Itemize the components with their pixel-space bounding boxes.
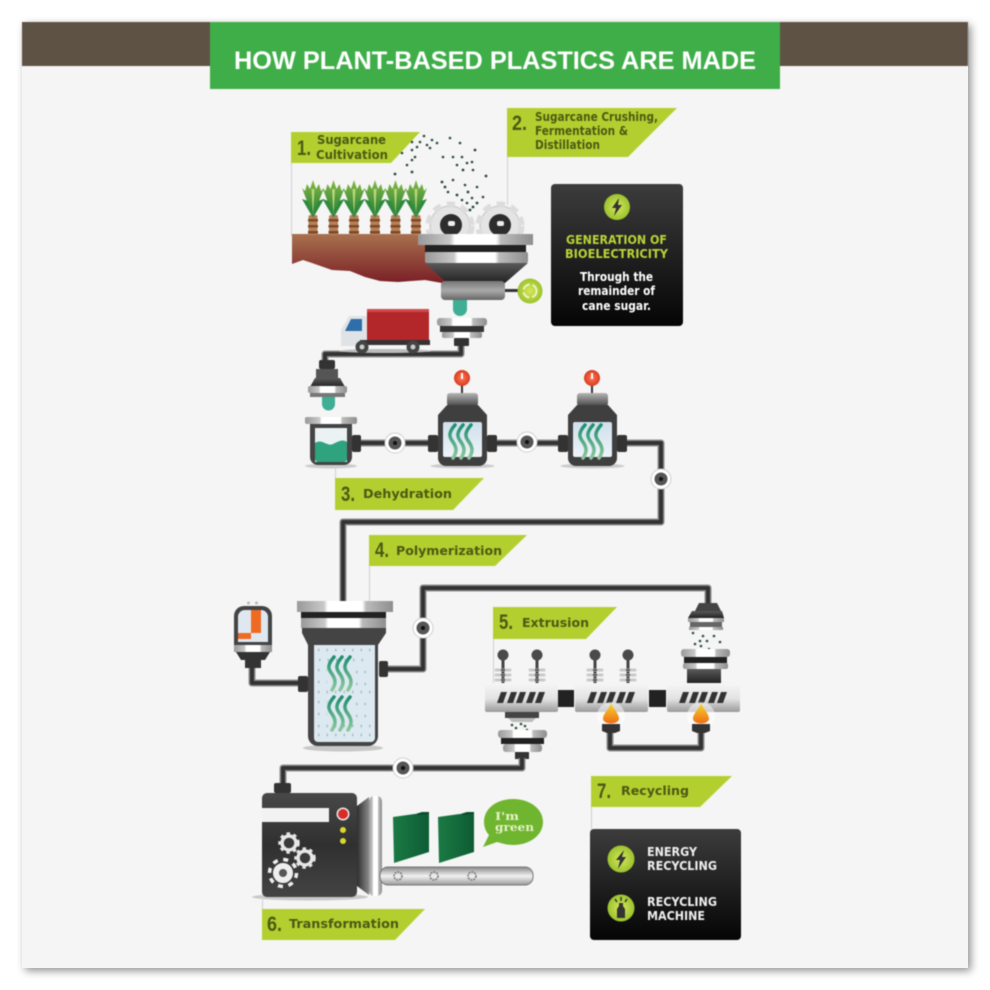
green product — [393, 812, 429, 863]
dehydration mixing tank — [305, 417, 361, 468]
nozzle above mixing tank — [308, 360, 347, 410]
main process pipes: dehydration — [343, 443, 661, 602]
label 1: 1. — [297, 137, 311, 160]
transformation machine — [252, 783, 382, 900]
bubbles — [318, 650, 372, 735]
pipe: to transformation — [283, 758, 522, 784]
burners — [597, 702, 715, 733]
label 1: Sugarcane — [317, 132, 386, 147]
extruder control levers — [496, 650, 635, 683]
sugarcane particles — [394, 135, 487, 211]
pipe: machine to dehydration — [325, 346, 461, 362]
label 5 — [493, 607, 617, 684]
valve — [393, 758, 413, 778]
soil — [292, 234, 445, 283]
label 4 — [369, 535, 527, 602]
label 2: 2. — [512, 112, 527, 135]
recycling panel: ENERGY — [647, 845, 697, 859]
extruder connectors — [557, 690, 666, 707]
label 1: Cultivation — [316, 147, 388, 162]
valve — [517, 432, 537, 452]
label 2: Fermentation & — [535, 123, 628, 138]
step 1 sugarcane field — [292, 162, 445, 283]
truck — [339, 309, 431, 354]
valve — [413, 618, 433, 638]
label 7: Recycling — [621, 783, 689, 798]
gears — [270, 834, 314, 886]
pressure gauge — [234, 602, 272, 668]
extruder blocks — [485, 683, 740, 712]
reactor tank 1 — [428, 370, 497, 468]
label 5: Extrusion — [522, 615, 589, 630]
extruder hopper — [681, 603, 730, 683]
reactor tank 2 — [558, 370, 627, 468]
label 6: Transformation — [289, 916, 399, 931]
valve — [651, 469, 671, 489]
bioelectricity panel: remainder of — [578, 284, 656, 298]
outlet particles — [511, 723, 528, 731]
speech bubble — [483, 799, 543, 847]
bioelectricity panel: Through the — [580, 270, 653, 284]
label 3: Dehydration — [363, 486, 452, 501]
label 4: Polymerization — [396, 543, 502, 558]
label 3 — [335, 465, 484, 510]
speech bubble: green — [495, 821, 534, 834]
label 7: 7. — [597, 780, 611, 803]
label 2: Distillation — [535, 137, 600, 152]
label 3: 3. — [341, 483, 355, 506]
recycle indicator — [518, 278, 542, 304]
label 6: 6. — [267, 913, 282, 936]
bioelectricity panel — [551, 184, 683, 326]
speech bubble: I'm — [495, 810, 519, 823]
label 5: 5. — [499, 611, 513, 634]
label 7 — [591, 776, 732, 830]
hopper particles — [692, 632, 721, 650]
icon: energy — [608, 846, 634, 872]
bioelectricity panel: GENERATION OF — [566, 233, 667, 247]
bioelectricity panel: cane sugar. — [582, 299, 651, 313]
receiver — [437, 318, 487, 346]
recycling panel: MACHINE — [647, 909, 705, 923]
polymerization tank — [297, 601, 393, 752]
title — [210, 22, 780, 89]
recycling panel: RECYCLING — [647, 859, 717, 873]
label 1 — [291, 132, 420, 163]
icon: bottle — [608, 894, 634, 922]
recycling panel: RECYCLING — [647, 895, 717, 909]
recycling panel — [590, 829, 741, 940]
label 6 — [262, 897, 425, 940]
title: HOW PLANT-BASED PLASTICS ARE MADE — [234, 47, 756, 75]
pipes: polymerization outlets — [252, 588, 708, 683]
conveyor belt — [380, 867, 533, 885]
icon: lightning — [604, 194, 630, 220]
crushing machine — [418, 204, 542, 346]
valve — [385, 433, 405, 453]
green product — [438, 812, 474, 863]
label 4: 4. — [375, 539, 389, 562]
bioelectricity panel: BIOELECTRICITY — [565, 247, 668, 261]
header band — [22, 22, 968, 66]
sugarcane plants — [302, 180, 427, 235]
pipe: burners — [610, 732, 701, 748]
gears — [428, 204, 522, 248]
label 2 — [507, 108, 677, 205]
extruder outlet — [498, 712, 547, 759]
label 2: Sugarcane Crushing, — [535, 109, 658, 124]
